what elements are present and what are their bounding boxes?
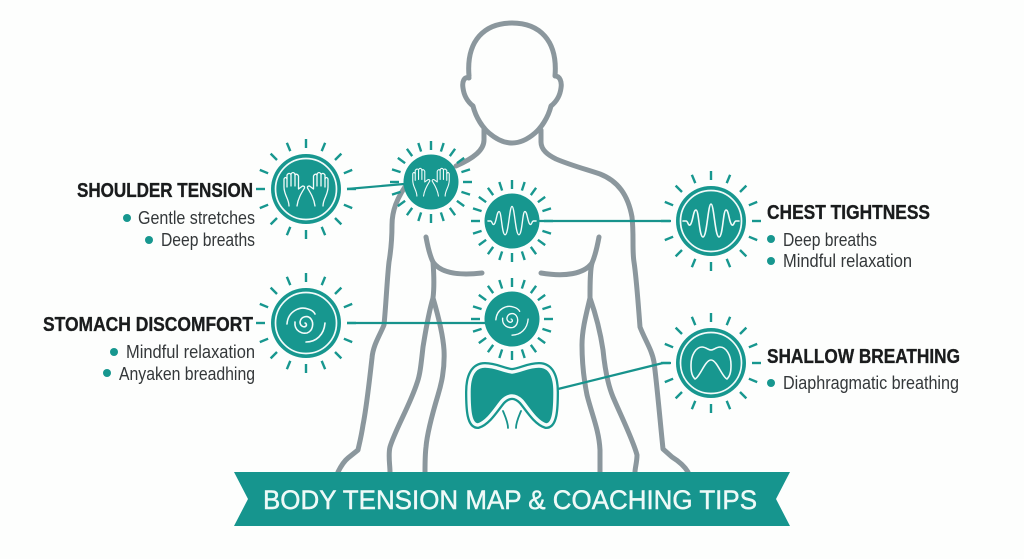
tip: diaphragmatic breathing: Diaphragmatic breathing: [783, 373, 959, 393]
tip: mindful relaxation: Mindful relaxation: [783, 251, 912, 271]
tip: mindful relaxation: Mindful relaxation: [126, 342, 255, 362]
marker: stomach on body: [471, 278, 553, 360]
heading: stomach discomfort: STOMACH DISCOMFORT: [43, 314, 253, 336]
callout: shallow breathing: [661, 313, 960, 413]
marker: shoulder on body: [390, 141, 472, 223]
tip: gentle stretches: Gentle stretches: [138, 208, 255, 228]
callout: stomach discomfort: [43, 273, 356, 384]
tip: deep breaths: Deep breaths: [161, 230, 255, 250]
title banner: [234, 472, 790, 526]
icon: diaphragm organ: [469, 366, 555, 428]
icon: hands: [256, 139, 356, 239]
tip: anyaken breadhing: Anyaken breadhing: [119, 364, 255, 384]
callout: shoulder tension: [77, 139, 356, 250]
body outline: [338, 23, 688, 472]
heading: shallow breathing: SHALLOW BREATHING: [767, 346, 960, 368]
connector lines: [347, 184, 671, 389]
heading: shoulder tension: SHOULDER TENSION: [77, 180, 253, 202]
title: BODY TENSION MAP & COACHING TIPS: [263, 485, 757, 515]
icon: spiral: [256, 273, 356, 373]
icon: wave: [661, 171, 761, 271]
callout: chest tightness: [661, 171, 930, 271]
heading: chest tightness: CHEST TIGHTNESS: [767, 202, 930, 224]
marker: chest on body: [471, 180, 553, 262]
tip: deep breaths: Deep breaths: [783, 230, 877, 250]
icon: lungs: [661, 313, 761, 413]
